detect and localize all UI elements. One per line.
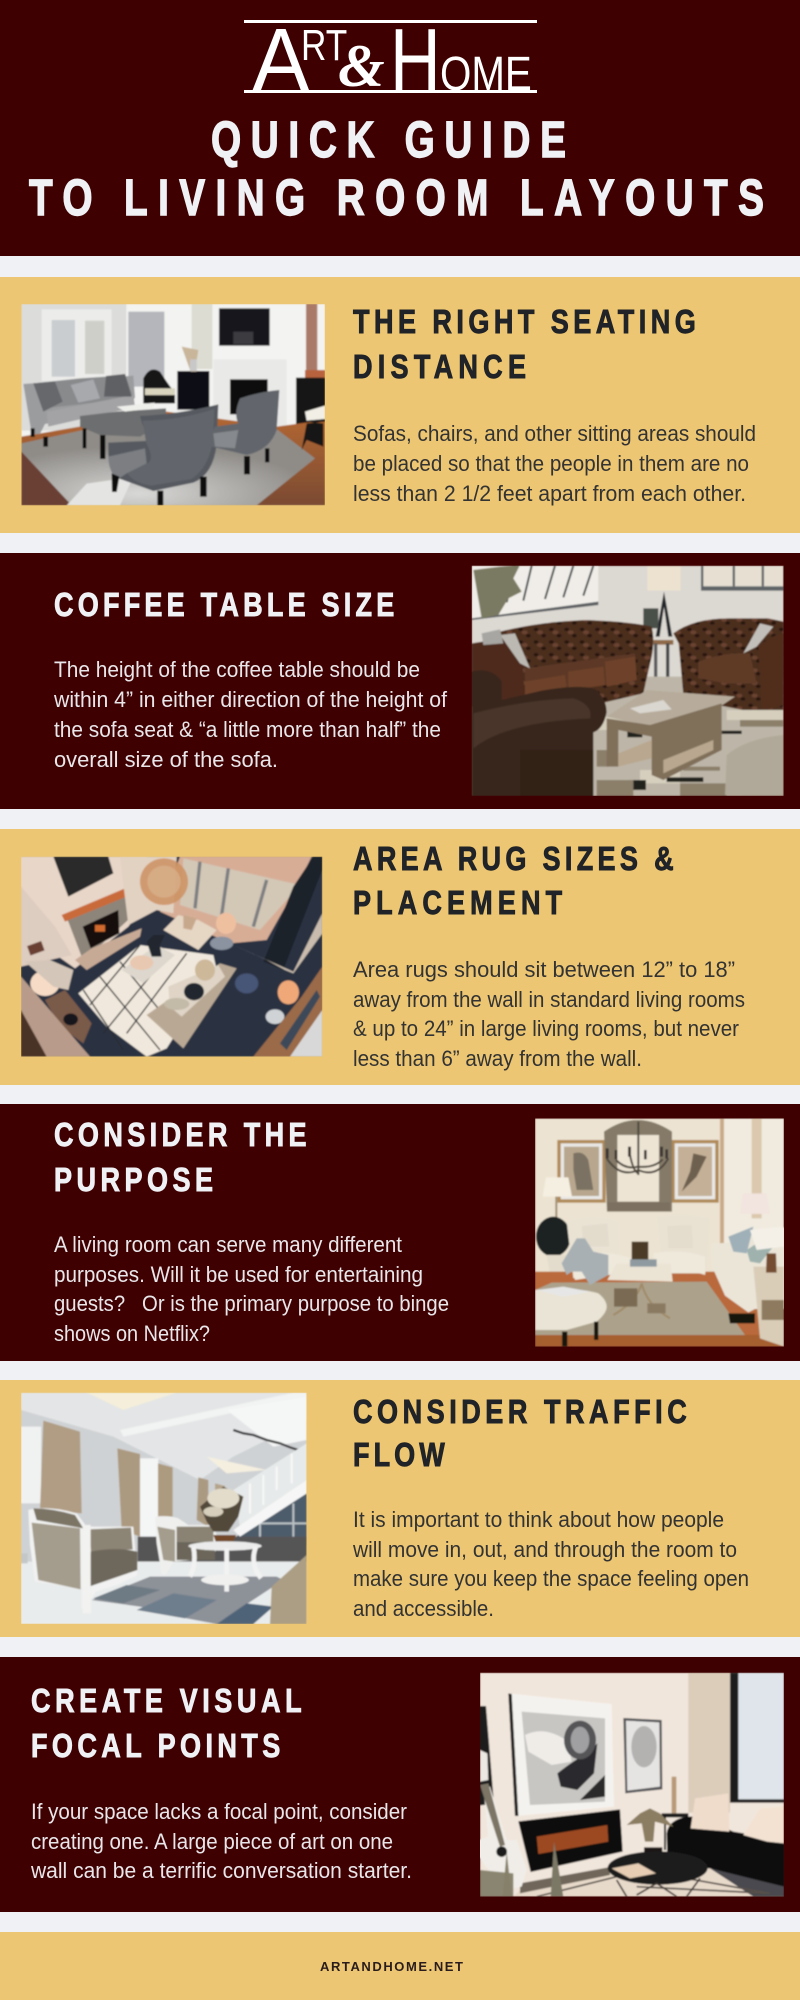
logo: Art & Home: A xyxy=(252,9,310,110)
header panel xyxy=(0,0,800,256)
body text: guests? Or is the primary purpose to binge xyxy=(54,1291,449,1316)
title xyxy=(29,111,764,226)
heading: CONSIDER THE xyxy=(54,1118,307,1154)
body text: Area rugs should sit between 12” to 18” xyxy=(353,957,735,982)
body text: make sure you keep the space feeling open xyxy=(353,1566,749,1591)
heading: AREA RUG SIZES & xyxy=(353,842,674,878)
body text: It is important to think about how people xyxy=(353,1507,724,1532)
body text: A living room can serve many different xyxy=(54,1232,402,1257)
panel: area rug sizes and placement xyxy=(0,829,800,1085)
logo: Art & Home: RT xyxy=(301,21,347,70)
heading: COFFEE TABLE SIZE xyxy=(54,588,394,624)
footer text: website: ARTANDHOME.NET xyxy=(320,1959,463,1974)
body text: The height of the coffee table should be xyxy=(54,657,420,682)
body text xyxy=(353,957,745,1071)
body text xyxy=(353,421,756,506)
body text: shows on Netflix? xyxy=(54,1321,210,1346)
body text: less than 6” away from the wall. xyxy=(353,1046,642,1071)
panel: create visual focal points xyxy=(0,1657,800,1912)
heading xyxy=(353,305,696,386)
body text: be placed so that the people in them are no xyxy=(353,451,749,476)
body text: purposes. Will it be used for entertaining xyxy=(54,1262,423,1287)
photo: brown leather chesterfield sofas xyxy=(472,565,784,796)
title: QUICK GUIDE xyxy=(211,111,566,168)
body text: less than 2 1/2 feet apart from each other. xyxy=(353,481,746,506)
logo: Art & Home xyxy=(244,9,537,111)
photo: room with guitar art and fireplace xyxy=(478,1673,784,1897)
body text xyxy=(53,657,448,772)
heading xyxy=(31,1684,302,1765)
body text: will move in, out, and through the room to xyxy=(352,1537,737,1562)
photo: overhead view of room with patterned rug xyxy=(21,857,322,1057)
panel: consider traffic flow xyxy=(0,1380,800,1637)
heading: FLOW xyxy=(353,1438,445,1474)
heading: CREATE VISUAL xyxy=(31,1684,302,1720)
body text: and accessible. xyxy=(353,1596,494,1621)
panel: consider the purpose xyxy=(0,1104,800,1361)
body text: away from the wall in standard living rooms xyxy=(353,987,745,1012)
body text: the sofa seat & “a little more than half” the xyxy=(54,717,441,742)
heading: PURPOSE xyxy=(54,1163,213,1199)
heading xyxy=(353,842,674,922)
body text: overall size of the sofa. xyxy=(54,747,278,772)
body text xyxy=(54,1232,449,1346)
body text: wall can be a terrific conversation starter. xyxy=(30,1858,412,1883)
heading: THE RIGHT SEATING xyxy=(353,305,696,341)
heading xyxy=(353,1395,687,1474)
logo: Art & Home: OME xyxy=(440,48,532,101)
heading: CONSIDER TRAFFIC xyxy=(353,1395,687,1431)
body text: creating one. A large piece of art on one xyxy=(31,1829,393,1854)
panel: the right seating distance xyxy=(0,277,800,533)
body text xyxy=(352,1507,749,1621)
photo: grey living room with velvet chairs xyxy=(21,304,325,505)
photo: cream living room with chandelier xyxy=(535,1118,785,1347)
body text: & up to 24” in large living rooms, but never xyxy=(353,1016,739,1041)
heading: FOCAL POINTS xyxy=(31,1729,280,1765)
heading xyxy=(54,1118,307,1199)
logo: Art & Home: & xyxy=(338,33,385,99)
body text: within 4” in either direction of the height of xyxy=(53,687,448,712)
body text xyxy=(30,1799,412,1883)
heading: DISTANCE xyxy=(353,350,526,386)
body text: Sofas, chairs, and other sitting areas should xyxy=(353,421,756,446)
logo: Art & Home: H xyxy=(390,11,441,111)
heading: PLACEMENT xyxy=(353,886,563,922)
footer band xyxy=(0,1932,800,2000)
body text: If your space lacks a focal point, consider xyxy=(31,1799,407,1824)
title: TO LIVING ROOM LAYOUTS xyxy=(29,169,764,226)
photo: white room with staircase and armchairs xyxy=(21,1393,307,1624)
panel: coffee table size xyxy=(0,553,800,809)
